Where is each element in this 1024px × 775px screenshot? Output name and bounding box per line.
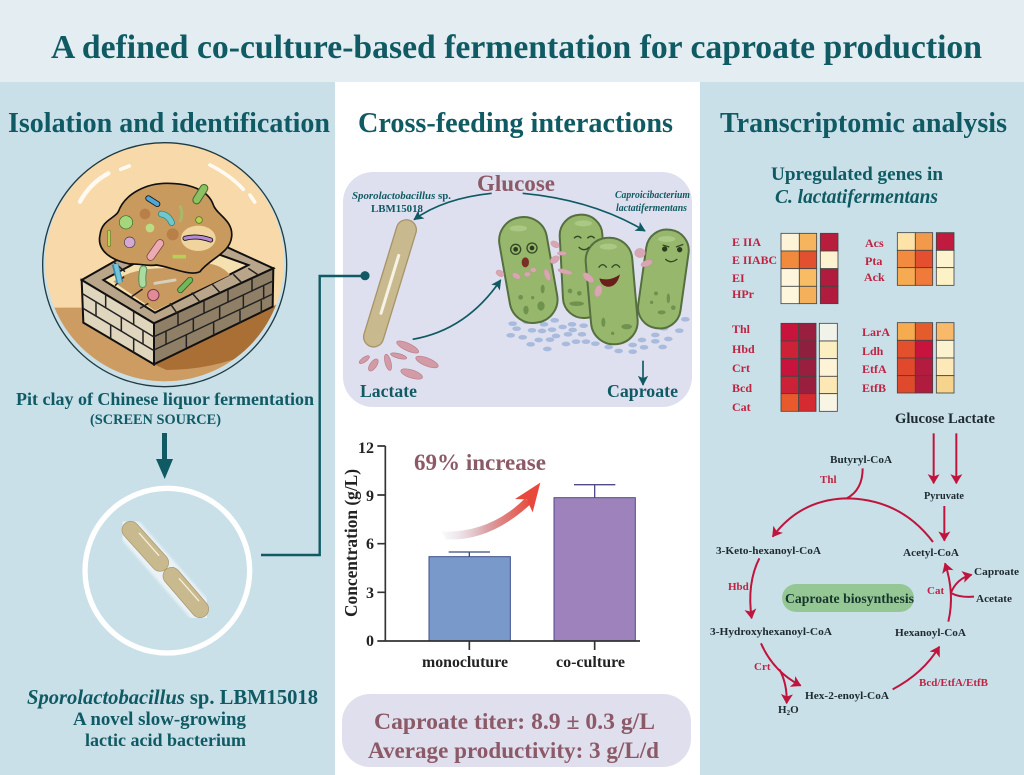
label: monoculture: monocluture — [422, 654, 508, 671]
gene labels: LarA — [862, 325, 890, 339]
subheading line 2: C. lactatifermentans — [775, 187, 938, 208]
tick labels: 0 — [366, 633, 374, 650]
heading: transcriptomic: Transcriptomic analysis — [720, 108, 1007, 139]
pathway: metabolites: H — [778, 704, 787, 716]
gene labels: EtfB — [862, 381, 886, 395]
pathway: enzymes: Bcd/EtfA/EtfB — [919, 677, 989, 689]
pathway: metabolites: Caproate — [974, 566, 1019, 578]
gene labels: Crt — [732, 361, 750, 375]
pathway: center pill — [782, 584, 914, 612]
gene labels: Acs — [865, 236, 884, 250]
pathway: metabolites: Acetyl-CoA — [903, 547, 959, 559]
gene labels: Thl — [732, 322, 751, 336]
pathway: enzymes: Crt — [754, 661, 771, 673]
axis title: Concentration (g/L) — [341, 469, 362, 617]
text: strain description line 2: lactic acid bacterium — [85, 730, 246, 750]
panel: isolation and identification — [0, 82, 335, 775]
gene labels: EI — [732, 271, 745, 285]
connector arrow to rod — [261, 271, 370, 555]
pathway: metabolites: Acetate — [976, 593, 1012, 605]
label: 69% increase: 69% increase — [414, 450, 546, 475]
icon: isolated bacterium in circle — [85, 488, 250, 653]
label: glucose: Glucose — [477, 171, 555, 196]
text: screen source: (SCREEN SOURCE) — [90, 412, 221, 428]
heatmap: lactate genes — [897, 323, 954, 393]
tick labels: 3 — [366, 585, 374, 602]
gene labels: E IIA — [732, 235, 761, 249]
tick labels: 6 — [366, 536, 374, 553]
heading: isolation: Isolation and identification — [8, 108, 330, 139]
label: lactate: Lactate — [360, 381, 417, 401]
gene labels: HPr — [732, 287, 755, 301]
pathway: caproate biosynthesis — [710, 433, 1019, 717]
heatmaps — [781, 233, 954, 411]
gene labels: Cat — [732, 400, 751, 414]
pathway: enzymes: Thl — [820, 474, 837, 486]
gene labels — [732, 235, 890, 414]
heading: cross-feeding: Cross-feeding interactions — [358, 108, 673, 139]
gene labels: Hbd — [732, 342, 755, 356]
panel: transcriptomic analysis background — [700, 82, 1024, 775]
gene labels: Ldh — [862, 344, 884, 358]
label: co-culture: co-culture — [556, 654, 625, 671]
pathway: metabolites: Butyryl-CoA — [830, 454, 892, 466]
icon: pit clay illustration — [33, 143, 287, 393]
panel: transcriptomic analysis content — [710, 108, 1019, 717]
pathway arrows — [750, 433, 974, 703]
gene labels: EtfA — [862, 362, 887, 376]
text: pit clay caption: Pit clay of Chinese liquor fermentation — [16, 389, 314, 409]
label: caproate: Caproate — [607, 381, 678, 401]
text: productivity: Average productivity: 3 g/L/d — [368, 738, 659, 763]
text: strain name: Sporolactobacillus sp. LBM15018 — [27, 687, 318, 709]
pathway: metabolites: Hexanoyl-CoA — [895, 627, 966, 639]
text: strain description line 1: A novel slow-growing — [73, 710, 247, 730]
heatmap: chain elongation genes — [781, 323, 837, 411]
tick labels: 9 — [366, 488, 374, 505]
label: sporolactobacillus line 2: LBM15018 — [371, 203, 423, 215]
label: caproicibacterium line 2: lactatifermentans — [616, 203, 687, 214]
pathway: metabolites: Pyruvate — [924, 490, 964, 502]
arrow: increase — [442, 483, 540, 539]
pathway: center pill: Caproate biosynthesis — [785, 591, 914, 606]
panel: cross-feeding interactions — [261, 108, 692, 767]
gene labels: Pta — [865, 254, 882, 268]
pathway: metabolites: 2 — [787, 709, 791, 717]
arrow: isolation down — [156, 433, 173, 479]
pathway: metabolites: O — [790, 704, 799, 716]
pathway: metabolites: 3-Hydroxyhexanoyl-CoA — [710, 626, 832, 638]
pathway: metabolites: 3-Keto-hexanoyl-CoA — [716, 545, 821, 557]
bar: monoculture — [429, 552, 510, 641]
pathway: enzymes — [728, 474, 989, 689]
label: glucose lactate: Glucose Lactate — [895, 411, 996, 427]
gene labels: E IIABC — [732, 253, 777, 267]
tick labels: 12 — [358, 440, 374, 457]
text: titer: Caproate titer: 8.9 ± 0.3 g/L — [374, 709, 655, 734]
heatmap: acetate genes — [897, 233, 954, 285]
heatmap: PTS genes — [781, 233, 838, 304]
gene labels: Ack — [864, 270, 885, 284]
bar: co-culture — [554, 485, 635, 641]
pathway: enzymes: Hbd — [728, 581, 749, 593]
label: caproicibacterium line 1: Caproicibacterium — [615, 190, 690, 201]
callout: titer and productivity — [342, 694, 691, 767]
axes — [377, 446, 640, 650]
title: A defined co-culture-based fermentation for caproate production — [51, 29, 982, 66]
box: cross-feeding diagram — [343, 172, 692, 407]
pathway: enzymes: Cat — [927, 585, 944, 597]
pathway: metabolites — [710, 454, 1019, 717]
bar chart — [341, 440, 640, 671]
title band — [0, 0, 1024, 82]
illustration: cross-feeding — [358, 193, 691, 385]
subheading line 1: Upregulated genes in — [771, 164, 943, 185]
label: sporolactobacillus line 1: Sporolactobacillus sp. — [352, 190, 451, 202]
tick labels — [358, 440, 374, 650]
pathway: metabolites: Hex-2-enoyl-CoA — [805, 690, 889, 702]
gene labels: Bcd — [732, 381, 752, 395]
